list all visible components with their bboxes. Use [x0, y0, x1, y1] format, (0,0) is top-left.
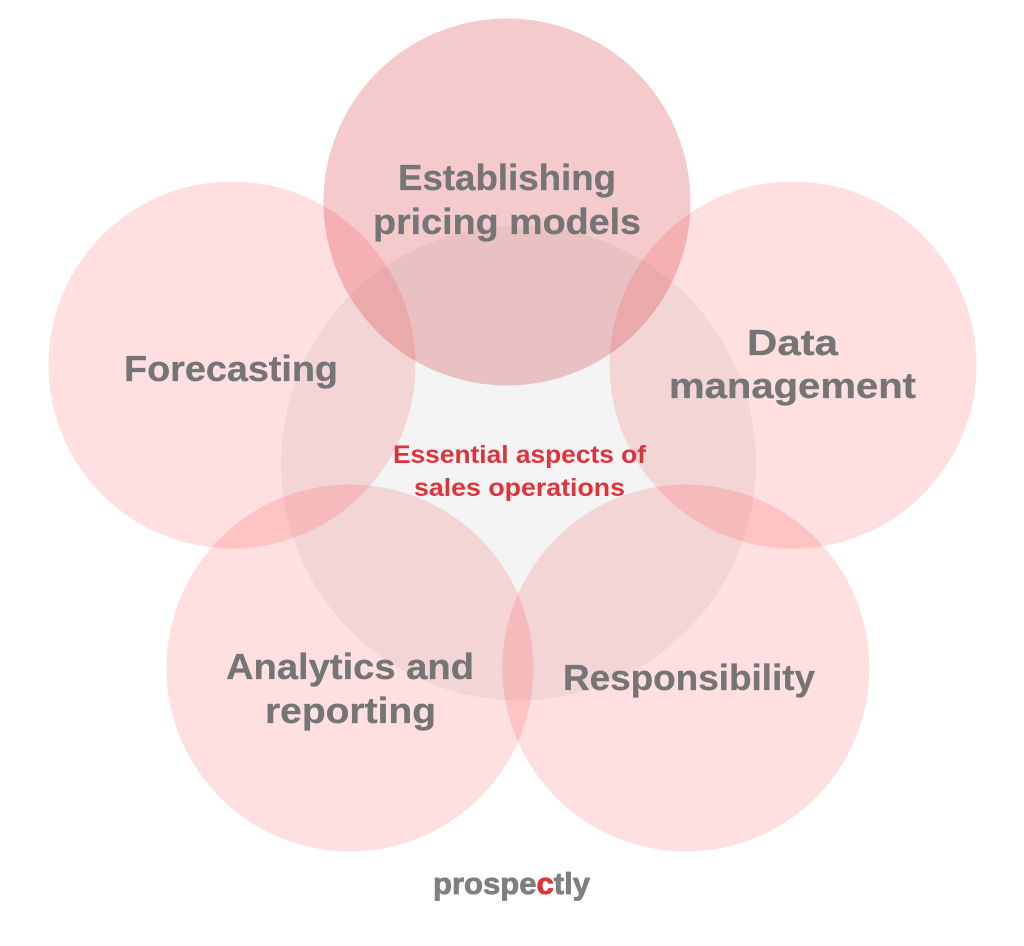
label: data management — [669, 322, 916, 406]
circle: forecasting — [48, 182, 416, 548]
center title: Essential aspects of — [393, 441, 647, 469]
label: analytics and reporting — [226, 646, 474, 731]
label: establishing pricing models: pricing models — [373, 201, 641, 242]
label: data management: Data — [747, 322, 839, 363]
center title — [393, 441, 647, 502]
label: establishing pricing models — [373, 157, 641, 242]
circle: establishing pricing models — [324, 18, 690, 386]
logo: prospectly: prospectly — [433, 866, 591, 901]
center title: sales operations — [414, 474, 625, 502]
label: responsibility: Responsibility — [563, 657, 815, 698]
circle: data management — [610, 182, 976, 548]
circle: center — [281, 226, 756, 700]
label: analytics and reporting: reporting — [265, 690, 436, 731]
label: data management: management — [669, 365, 916, 406]
label: forecasting: Forecasting — [124, 348, 338, 389]
circle: responsibility — [502, 484, 870, 852]
circle: analytics and reporting — [166, 484, 534, 852]
label: analytics and reporting: Analytics and — [226, 646, 474, 687]
label: establishing pricing models: Establishing — [398, 157, 616, 198]
